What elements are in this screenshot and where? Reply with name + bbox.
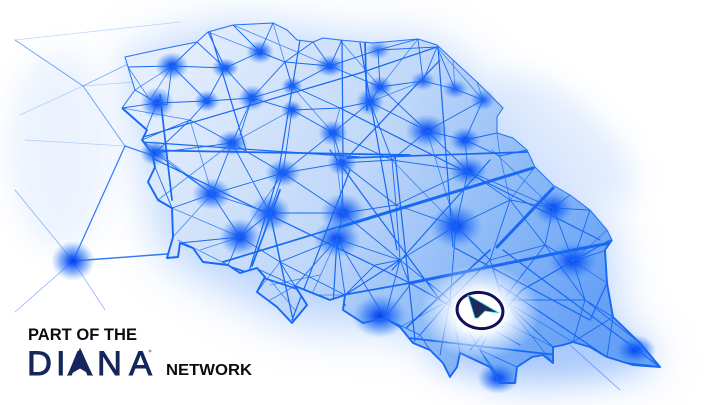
marker disc xyxy=(455,289,505,332)
logo arrow xyxy=(68,349,92,375)
external network lines west of the map xyxy=(15,22,620,390)
triangulated network mesh xyxy=(122,23,660,378)
white glow xyxy=(420,264,540,360)
glowing network nodes xyxy=(140,40,656,394)
map outline: southern edge xyxy=(122,108,660,383)
location marker with white glow xyxy=(420,264,540,360)
marker arrow xyxy=(468,295,499,318)
map of the region xyxy=(122,23,660,394)
external node glow xyxy=(51,241,95,281)
heading: network: NETWORK xyxy=(166,362,252,379)
heading: part of the: PART OF THE xyxy=(28,326,137,344)
logo: DIANA: DIANA xyxy=(27,345,152,383)
map outline: northern edge xyxy=(122,23,612,240)
registered mark xyxy=(149,350,151,352)
map area fill xyxy=(122,23,660,383)
